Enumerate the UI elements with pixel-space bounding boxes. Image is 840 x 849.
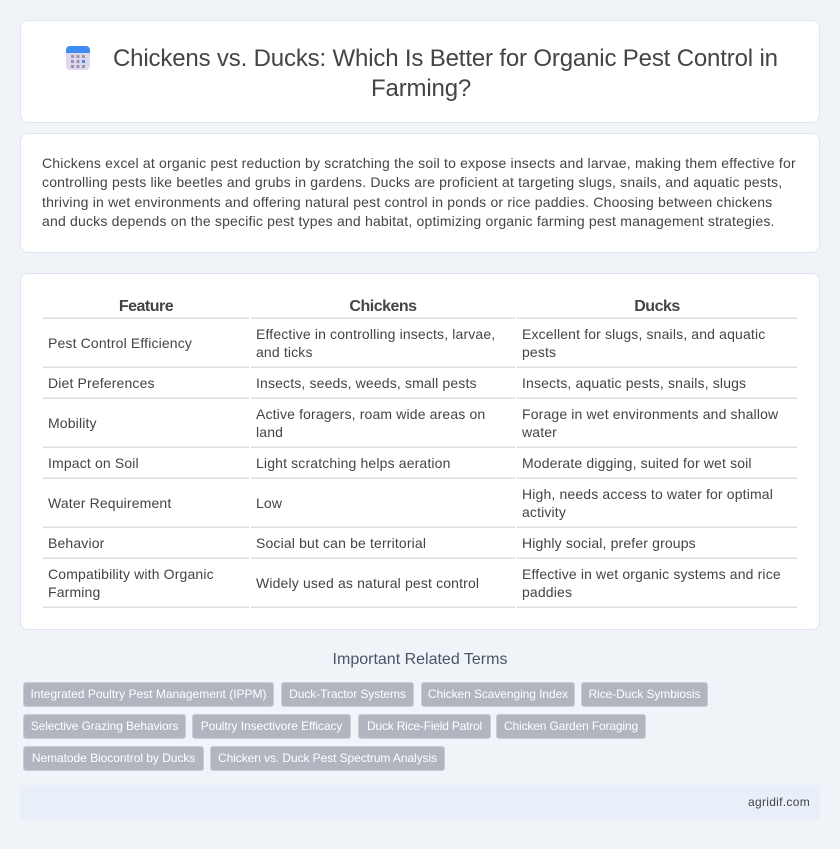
footer bar <box>20 785 820 819</box>
related terms tags: Poultry Insectivore Efficacy <box>201 719 342 733</box>
row: mobility: Active foragers, roam wide areas on <box>256 406 485 422</box>
intro paragraph: Chickens excel at organic pest reduction by scratching the soil to expose insects and larvae, making them effective for <box>42 155 796 171</box>
row: diet preferences: Insects, seeds, weeds, small pests <box>256 375 477 391</box>
title: Farming? <box>371 75 471 102</box>
related terms tags: Chicken Scavenging Index <box>428 687 568 701</box>
related terms tags: Chicken Garden Foraging <box>504 719 638 733</box>
intro paragraph: controlling pests like beetles and grubs in gardens. Ducks are proficient at targeting slugs, snails, and aquatic pests, <box>42 174 782 190</box>
row: pest control efficiency: pests <box>522 344 556 360</box>
row: pest control efficiency: Effective in controlling insects, larvae, <box>256 326 495 342</box>
row: pest control efficiency: Pest Control Efficiency <box>48 335 192 351</box>
row: impact on soil: Light scratching helps aeration <box>256 455 451 471</box>
related terms tags: Duck-Tractor Systems <box>289 687 406 701</box>
intro paragraph <box>42 155 796 229</box>
row: water requirement: Water Requirement <box>48 495 171 511</box>
row: impact on soil <box>48 455 752 471</box>
footer source: agridif.com <box>748 795 810 809</box>
intro text panel <box>20 133 820 253</box>
row: water requirement: High, needs access to water for optimal <box>522 486 773 502</box>
row: water requirement: Low <box>256 495 282 511</box>
related terms tags: Selective Grazing Behaviors <box>31 719 178 733</box>
row: behavior: Behavior <box>48 535 104 551</box>
related terms tags: Duck Rice-Field Patrol <box>367 719 482 733</box>
row: pest control efficiency <box>48 326 765 360</box>
row: mobility: land <box>256 424 283 440</box>
row: mobility <box>48 406 778 440</box>
related terms heading: Important Related Terms <box>333 651 507 668</box>
row: behavior: Social but can be territorial <box>256 535 426 551</box>
row: compatibility with organic farming: Farming <box>48 584 100 600</box>
title: Chickens vs. Ducks: Which Is Better for Organic Pest Control in <box>113 45 778 72</box>
comparison table panel <box>20 273 820 630</box>
related terms tags: Nematode Biocontrol by Ducks <box>32 751 195 765</box>
row: impact on soil: Moderate digging, suited for wet soil <box>522 455 752 471</box>
row: mobility: water <box>522 424 557 440</box>
row: diet preferences <box>48 375 746 391</box>
row: behavior: Highly social, prefer groups <box>522 535 696 551</box>
table header row: Feature <box>119 298 173 315</box>
title <box>113 45 778 102</box>
related terms tags: Rice-Duck Symbiosis <box>589 687 700 701</box>
row: water requirement: activity <box>522 504 566 520</box>
row: compatibility with organic farming: Effective in wet organic systems and rice <box>522 566 781 582</box>
row: compatibility with organic farming: Compatibility with Organic <box>48 566 214 582</box>
intro paragraph: thriving in wet environments and offering natural pest control in ponds or rice paddies. Choosing between chickens <box>42 194 772 210</box>
intro paragraph: and ducks depends on the specific pest types and habitat, optimizing organic farming pest management strategies. <box>42 213 775 229</box>
table header row: Ducks <box>634 298 680 315</box>
row: diet preferences: Insects, aquatic pests, snails, slugs <box>522 375 746 391</box>
icon: calendar <box>66 46 90 70</box>
related terms tags: Integrated Poultry Pest Management (IPPM) <box>30 687 267 701</box>
table header row <box>119 298 680 315</box>
table header row: Chickens <box>349 298 417 315</box>
row: water requirement <box>48 486 773 520</box>
row: compatibility with organic farming <box>48 566 781 600</box>
related terms tags <box>23 682 708 771</box>
row: diet preferences: Diet Preferences <box>48 375 155 391</box>
row: impact on soil: Impact on Soil <box>48 455 139 471</box>
row: compatibility with organic farming: Widely used as natural pest control <box>256 575 479 591</box>
row: pest control efficiency: Excellent for slugs, snails, and aquatic <box>522 326 765 342</box>
header panel <box>20 20 820 123</box>
row: mobility: Mobility <box>48 415 97 431</box>
row: mobility: Forage in wet environments and shallow <box>522 406 778 422</box>
row: pest control efficiency: and ticks <box>256 344 313 360</box>
row: compatibility with organic farming: paddies <box>522 584 572 600</box>
row: behavior <box>48 535 696 551</box>
related terms tags: Chicken vs. Duck Pest Spectrum Analysis <box>218 751 437 765</box>
